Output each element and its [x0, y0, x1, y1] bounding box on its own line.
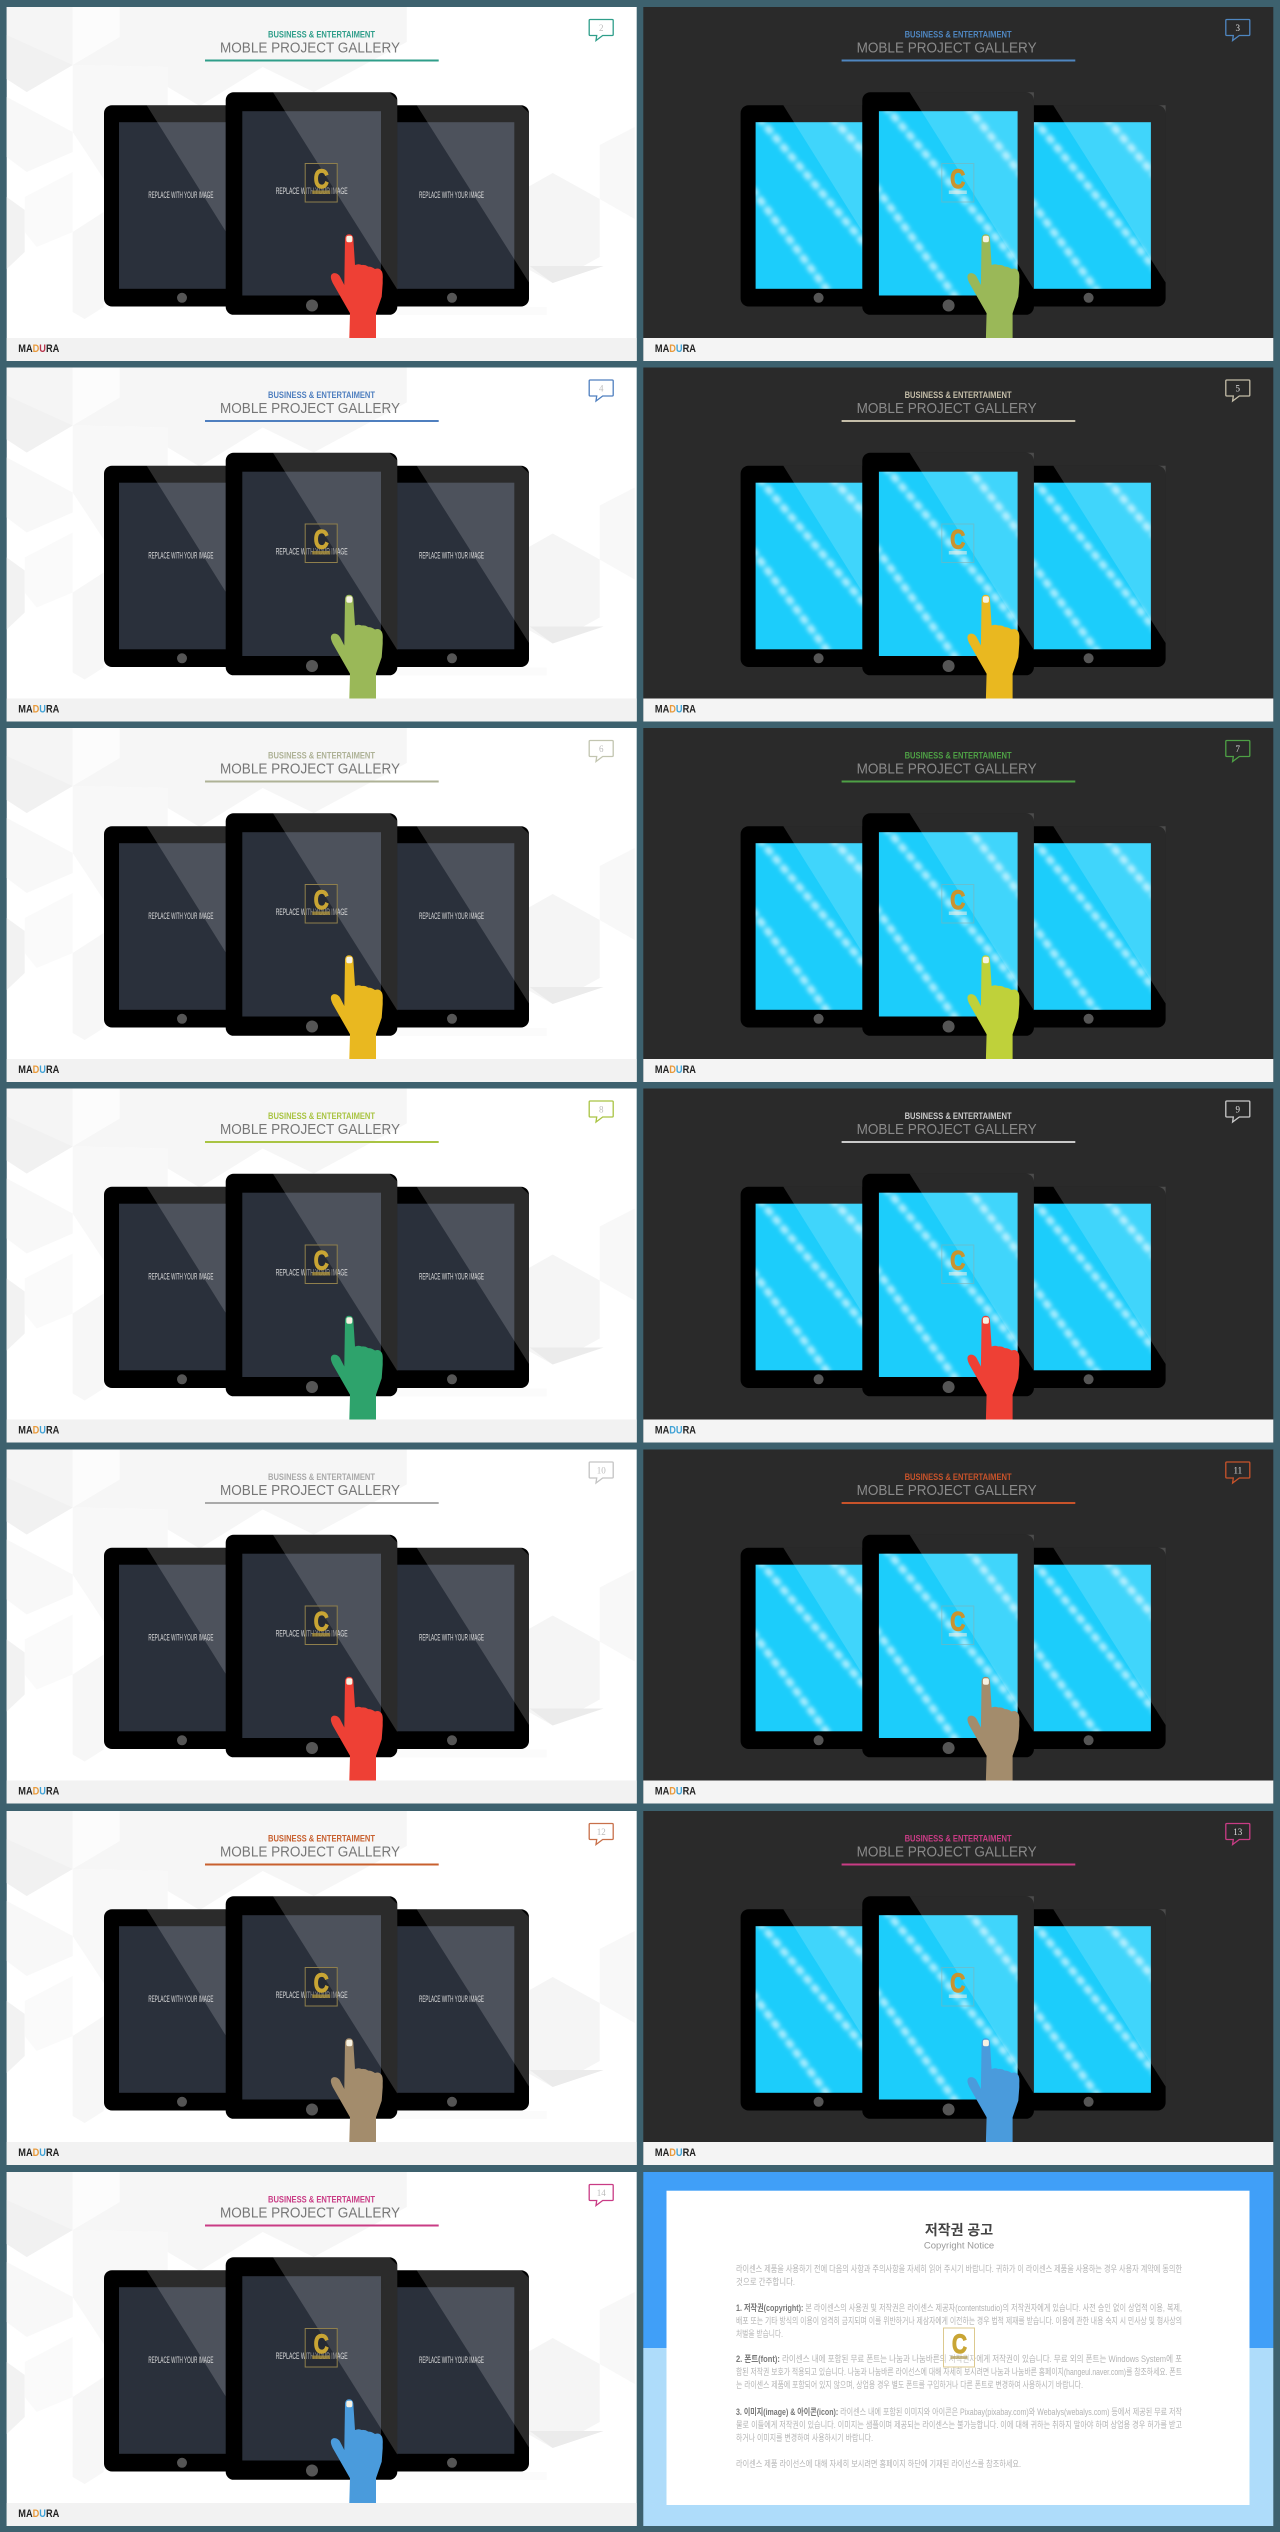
page number bubble: 7	[1236, 744, 1241, 754]
footer bar	[643, 1780, 1273, 1804]
page number bubble: 10	[597, 1466, 606, 1476]
copyright body text: 하거나 이미지를 변경하여 사용하시기 바랍니다.	[736, 2432, 873, 2443]
tablets: REPLACE WITH YOUR IMAGE	[419, 911, 484, 921]
footer bar	[643, 1420, 1273, 1442]
watermark logo	[944, 2328, 974, 2367]
tablets: REPLACE WITH YOUR IMAGE	[419, 1272, 484, 1282]
heading	[205, 390, 439, 422]
tablets: REPLACE WITH YOUR IMAGE	[276, 1990, 348, 2000]
watermark logo: C	[314, 885, 329, 915]
panel: slide 14	[7, 2172, 637, 2526]
heading: MOBLE PROJECT GALLERY	[220, 2205, 400, 2222]
panel: slide 4	[7, 368, 637, 722]
tablets: REPLACE WITH YOUR IMAGE	[276, 186, 348, 196]
footer bar: MADURA	[655, 343, 696, 355]
page number bubble: 3	[1236, 23, 1241, 33]
footer bar	[7, 698, 637, 722]
tablets	[104, 2257, 529, 2480]
watermark logo	[942, 1245, 974, 1284]
footer bar: MADURA	[18, 2508, 59, 2520]
footer bar: MADURA	[655, 2147, 696, 2159]
footer bar	[7, 1780, 637, 1804]
hand pointer	[331, 595, 383, 698]
footer bar	[643, 1059, 1273, 1082]
panel: slide 13	[643, 1811, 1273, 2165]
copyright heading: Copyright Notice	[924, 2240, 994, 2252]
heading	[842, 1111, 1075, 1143]
panel: slide 3	[643, 7, 1273, 361]
heading: BUSINESS & ENTERTAIMENT	[905, 1472, 1012, 1482]
hand pointer	[967, 595, 1019, 698]
heading: BUSINESS & ENTERTAIMENT	[905, 1834, 1012, 1844]
footer bar: MADURA	[18, 2147, 59, 2159]
tablets: REPLACE WITH YOUR IMAGE	[419, 1994, 484, 2004]
copyright heading	[924, 2222, 994, 2252]
heading: BUSINESS & ENTERTAIMENT	[905, 390, 1012, 400]
footer bar	[7, 2142, 637, 2165]
heading: MOBLE PROJECT GALLERY	[220, 1844, 400, 1861]
heading: BUSINESS & ENTERTAIMENT	[905, 30, 1012, 40]
watermark logo: C	[950, 1968, 965, 1998]
page number bubble	[1226, 1101, 1250, 1122]
heading: MOBLE PROJECT GALLERY	[220, 1482, 400, 1499]
heading	[205, 750, 439, 782]
heading: MOBLE PROJECT GALLERY	[857, 1482, 1037, 1499]
hand pointer	[331, 234, 383, 338]
watermark logo	[305, 164, 337, 202]
panel: slide 5	[643, 368, 1273, 722]
footer bar: MADURA	[18, 343, 59, 355]
panel: copyright notice	[643, 2172, 1273, 2526]
watermark logo	[305, 1606, 337, 1644]
page number bubble: 5	[1236, 384, 1241, 394]
page number bubble	[1226, 20, 1250, 40]
tablets: REPLACE WITH YOUR IMAGE	[148, 1632, 213, 1642]
tablets	[741, 1535, 1166, 1757]
heading: MOBLE PROJECT GALLERY	[220, 400, 400, 417]
page number bubble: 6	[599, 744, 604, 754]
tablets: REPLACE WITH YOUR IMAGE	[419, 550, 484, 560]
page number bubble	[589, 740, 613, 762]
page number bubble: 13	[1233, 1827, 1243, 1837]
footer bar: MADURA	[18, 1424, 59, 1436]
watermark logo: C	[950, 885, 965, 915]
tablets: REPLACE WITH YOUR IMAGE	[148, 550, 213, 560]
footer bar	[643, 698, 1273, 722]
heading: MOBLE PROJECT GALLERY	[857, 1844, 1037, 1861]
tablets: REPLACE WITH YOUR IMAGE	[276, 907, 348, 917]
hand pointer	[967, 1316, 1019, 1420]
heading: MOBLE PROJECT GALLERY	[857, 400, 1037, 417]
footer bar: MADURA	[655, 1424, 696, 1436]
copyright body text: 1. 저작권(copyright): 본 라이센스의 사용권 및 저작권은 라이센스 제공자(contentstudio)의 저작권자에게 있습니다. 사전 승인 없이 상업적 이용, 복제,	[736, 2302, 1182, 2313]
watermark logo: C	[950, 1246, 965, 1276]
watermark logo: C	[314, 1246, 329, 1276]
footer bar: MADURA	[655, 704, 696, 716]
watermark logo	[305, 884, 337, 923]
heading: BUSINESS & ENTERTAIMENT	[268, 1472, 375, 1482]
tablets	[104, 1535, 529, 1757]
heading: MOBLE PROJECT GALLERY	[857, 1121, 1037, 1138]
copyright body text: 2. 폰트(font): 라이센스 내에 포함된 무료 폰트는 나눔과 나눔바른의 저작권자에게 저작권이 있습니다. 무료 외의 폰트는 Windows System에 포	[736, 2353, 1182, 2364]
page number bubble	[589, 20, 613, 40]
tablets	[104, 453, 529, 675]
tablets: REPLACE WITH YOUR IMAGE	[148, 1994, 213, 2004]
copyright body text: 처벌을 받습니다.	[736, 2328, 783, 2339]
hand pointer	[331, 955, 383, 1059]
tablets: REPLACE WITH YOUR IMAGE	[276, 547, 348, 557]
hand pointer	[967, 234, 1019, 338]
tablets	[741, 1896, 1166, 2119]
watermark logo: C	[314, 2329, 329, 2359]
footer bar	[643, 2142, 1273, 2165]
page number bubble	[589, 1462, 613, 1483]
heading	[205, 1834, 439, 1866]
copyright body text: 것으로 간주합니다.	[736, 2277, 795, 2287]
heading: BUSINESS & ENTERTAIMENT	[268, 1111, 375, 1121]
footer bar	[7, 338, 637, 361]
watermark logo	[942, 884, 974, 923]
watermark logo: C	[950, 164, 965, 194]
hand pointer	[331, 1677, 383, 1780]
tablets: REPLACE WITH YOUR IMAGE	[148, 1272, 213, 1282]
panel: slide 2	[7, 7, 637, 361]
tablets: REPLACE WITH YOUR IMAGE	[419, 1632, 484, 1642]
panel: slide 8	[7, 1088, 637, 1442]
tablets	[741, 92, 1166, 315]
tablets: REPLACE WITH YOUR IMAGE	[419, 2355, 484, 2365]
heading: BUSINESS & ENTERTAIMENT	[268, 2194, 375, 2204]
watermark logo	[305, 1245, 337, 1284]
panel: slide 10	[7, 1450, 637, 1804]
heading: BUSINESS & ENTERTAIMENT	[905, 750, 1012, 760]
heading	[842, 390, 1075, 422]
page number bubble: 4	[599, 384, 604, 394]
page number bubble	[589, 1824, 613, 1844]
tablets: REPLACE WITH YOUR IMAGE	[276, 2351, 348, 2361]
heading	[205, 1111, 439, 1143]
tablets	[104, 813, 529, 1036]
footer bar	[643, 338, 1273, 361]
heading	[842, 1472, 1075, 1504]
hand pointer	[967, 2038, 1019, 2142]
tablets: REPLACE WITH YOUR IMAGE	[148, 190, 213, 200]
watermark logo: C	[314, 1968, 329, 1998]
page number bubble	[1226, 1824, 1250, 1844]
watermark logo: C	[950, 524, 965, 554]
hand pointer	[967, 955, 1019, 1059]
watermark logo: C	[314, 1606, 329, 1636]
watermark logo: C	[950, 1606, 965, 1636]
heading: MOBLE PROJECT GALLERY	[857, 40, 1037, 57]
panel: slide 9	[643, 1088, 1273, 1442]
page number bubble: 14	[597, 2188, 606, 2198]
heading	[205, 30, 439, 62]
footer bar: MADURA	[655, 1064, 696, 1076]
watermark logo	[305, 1968, 337, 2006]
tablets	[741, 813, 1166, 1036]
watermark logo	[305, 2328, 337, 2367]
footer bar: MADURA	[18, 1786, 59, 1798]
page number bubble: 9	[1236, 1104, 1241, 1114]
footer bar	[7, 1059, 637, 1082]
copyright body text	[736, 2263, 1182, 2469]
page number bubble	[1226, 380, 1250, 401]
heading: BUSINESS & ENTERTAIMENT	[268, 750, 375, 760]
watermark logo	[942, 1968, 974, 2006]
tablets	[741, 453, 1166, 675]
page number bubble	[1226, 740, 1250, 762]
footer bar	[7, 2503, 637, 2526]
panel: slide 7	[643, 728, 1273, 1082]
heading: BUSINESS & ENTERTAIMENT	[268, 30, 375, 40]
tablets	[741, 1174, 1166, 1396]
heading	[205, 2194, 439, 2226]
watermark logo: C	[314, 164, 329, 194]
heading: MOBLE PROJECT GALLERY	[220, 761, 400, 778]
heading	[842, 750, 1075, 782]
footer bar: MADURA	[18, 704, 59, 716]
heading: BUSINESS & ENTERTAIMENT	[268, 1834, 375, 1844]
tablets: REPLACE WITH YOUR IMAGE	[276, 1629, 348, 1639]
panel: slide 6	[7, 728, 637, 1082]
tablets: REPLACE WITH YOUR IMAGE	[276, 1268, 348, 1278]
heading: BUSINESS & ENTERTAIMENT	[268, 390, 375, 400]
copyright body text: 라이센스 제품 라이선스에 대해 자세히 보시려면 홈페이지 하단에 기재된 라이선스를 참조하세요.	[736, 2458, 1021, 2469]
page number bubble	[589, 2184, 613, 2206]
tablets: REPLACE WITH YOUR IMAGE	[148, 911, 213, 921]
copyright body text: 는 라이센스 제품에 포함되어 있지 않으며, 상업용 경우 별도 폰트를 구입하거나 다른 폰트로 변경하여 사용하시기 바랍니다.	[736, 2379, 1083, 2390]
page number bubble: 11	[1233, 1466, 1242, 1476]
tablets	[104, 1896, 529, 2119]
page number bubble	[589, 1101, 613, 1122]
copyright heading: 저작권 공고	[925, 2222, 993, 2238]
heading: MOBLE PROJECT GALLERY	[220, 1121, 400, 1138]
hand pointer	[967, 1677, 1019, 1780]
panel: slide 11	[643, 1450, 1273, 1804]
tablets: REPLACE WITH YOUR IMAGE	[419, 190, 484, 200]
footer bar: MADURA	[655, 1786, 696, 1798]
page number bubble: 8	[599, 1104, 604, 1114]
copyright body text: 3. 이미지(image) & 아이콘(icon): 라이센스 내에 포함된 이미지와 아이콘은 Pixabay(pixabay.com)와 Webalys(webalys.com) 등에서 제공된 무료 저작	[736, 2406, 1182, 2417]
footer bar	[7, 1420, 637, 1442]
watermark logo	[942, 164, 974, 202]
hand pointer	[331, 1316, 383, 1420]
page number bubble: 12	[597, 1827, 606, 1837]
watermark logo	[305, 524, 337, 562]
tablets	[104, 1174, 529, 1396]
heading	[842, 1834, 1075, 1866]
page number bubble	[1226, 1462, 1250, 1483]
watermark logo	[942, 524, 974, 562]
heading	[205, 1472, 439, 1504]
tablets	[104, 92, 529, 315]
heading	[842, 30, 1075, 62]
watermark logo: C	[952, 2329, 967, 2359]
watermark logo: C	[314, 524, 329, 554]
hand pointer	[331, 2399, 383, 2503]
hand pointer	[331, 2038, 383, 2142]
footer bar: MADURA	[18, 1064, 59, 1076]
page number bubble: 2	[599, 23, 603, 33]
heading: MOBLE PROJECT GALLERY	[857, 761, 1037, 778]
tablets: REPLACE WITH YOUR IMAGE	[148, 2355, 213, 2365]
panel: slide 12	[7, 1811, 637, 2165]
heading: MOBLE PROJECT GALLERY	[220, 40, 400, 57]
heading: BUSINESS & ENTERTAIMENT	[905, 1111, 1012, 1121]
watermark logo	[942, 1606, 974, 1644]
page number bubble	[589, 380, 613, 401]
